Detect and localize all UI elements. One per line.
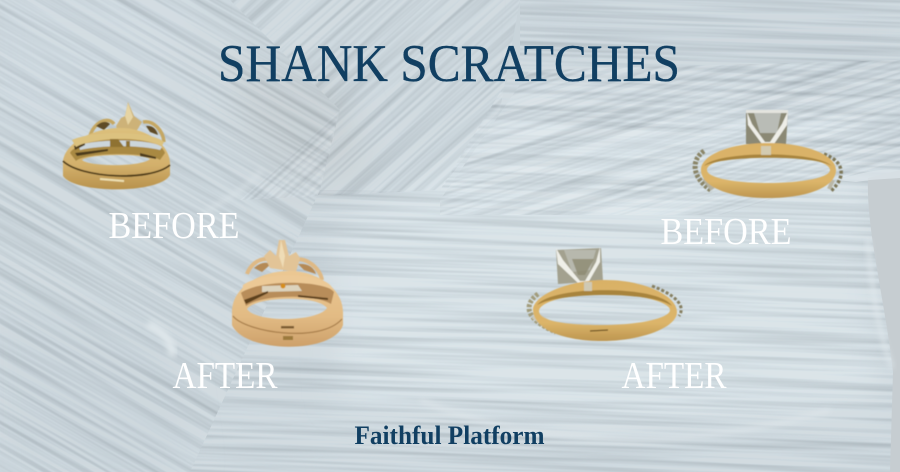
ring: right before xyxy=(695,110,841,198)
openings xyxy=(79,140,162,150)
ring: left after xyxy=(232,240,343,347)
crown xyxy=(90,120,164,142)
band body xyxy=(232,271,343,347)
label: before left: BEFORE xyxy=(108,205,240,247)
inner wall xyxy=(704,154,832,166)
band body xyxy=(533,280,677,341)
side stones xyxy=(529,286,681,332)
openings xyxy=(262,285,302,292)
title: SHANK SCRATCHES xyxy=(218,35,680,93)
inner wall xyxy=(70,139,165,161)
brand name: Faithful Platform xyxy=(354,421,545,450)
ring: left before xyxy=(63,102,170,189)
ring: right after xyxy=(529,247,681,341)
label: after left: AFTER xyxy=(172,355,278,397)
band body xyxy=(701,143,836,198)
groove xyxy=(233,316,342,333)
diamond setting xyxy=(556,248,603,284)
inner wall xyxy=(537,290,672,306)
crown xyxy=(247,259,322,280)
grey right margin xyxy=(868,170,900,472)
label: after right: AFTER xyxy=(622,355,727,397)
inner wall xyxy=(241,281,334,306)
groove xyxy=(63,161,170,176)
label: before right: BEFORE xyxy=(660,211,792,253)
side stones xyxy=(695,151,841,191)
band body xyxy=(63,128,170,189)
diamond setting xyxy=(746,112,788,144)
